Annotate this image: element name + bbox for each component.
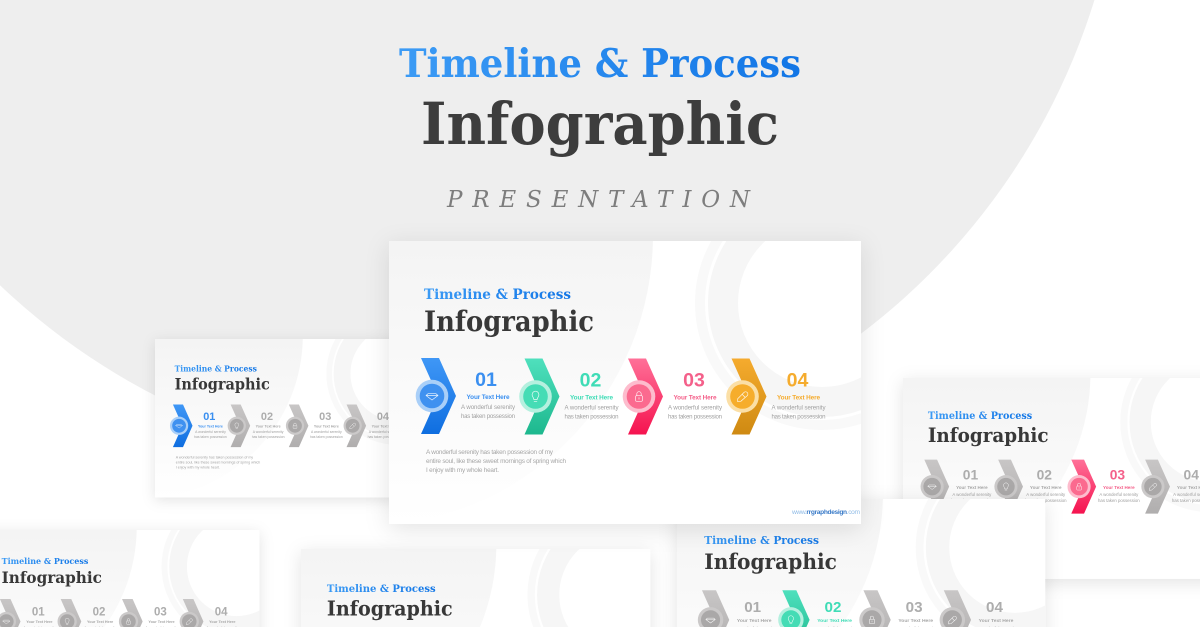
slide preview: bottom left, all steps grey: Your Text Here <box>26 620 53 624</box>
slide preview: right, step 3 active: 02 <box>1037 467 1052 483</box>
slide preview: left, step 1 active: 01 <box>203 411 215 423</box>
slide preview: right, step 3 active: 04 <box>1184 467 1199 483</box>
slide preview: bottom left, all steps grey: 04 <box>215 607 228 619</box>
slide preview: bottom right, step 2 active: Infographic <box>704 550 837 575</box>
slide preview: bottom right, step 2 active <box>672 498 1050 627</box>
headline: Infographic: Infographic <box>421 90 779 158</box>
headline: Timeline & Process: Timeline & Process <box>399 41 801 87</box>
slide preview: left, step 1 active: Your Text Here <box>198 424 223 428</box>
website link: www.rrgraphdesign.com <box>791 509 860 516</box>
slide preview: right, step 3 active: 03 <box>1110 467 1125 483</box>
slide preview: bottom left, all steps grey: 03 <box>154 607 167 619</box>
slide preview: right, step 3 active: has taken possession <box>951 498 993 503</box>
step 02 <box>519 358 619 434</box>
slide preview: bottom left, all steps grey: Timeline & Process <box>2 556 89 566</box>
slide preview: bottom middle: Timeline & Process <box>327 583 436 595</box>
slide preview: bottom middle: Infographic <box>327 597 453 621</box>
slide preview: left, step 1 active: 04 <box>377 411 389 423</box>
slide preview: bottom right, step 2 active: 04 <box>986 599 1003 616</box>
main slide preview <box>69 0 944 527</box>
slide preview: bottom right, step 2 active: Your Text Here <box>979 618 1014 624</box>
slide preview: left, step 1 active: has taken possession <box>368 435 401 439</box>
slide preview: left, step 1 active: Timeline & Process <box>175 364 257 373</box>
step 03: A wonderful serenity <box>668 404 723 412</box>
body paragraph: entire soul, like these sweet mornings of spring which <box>426 458 566 465</box>
body paragraph: I enjoy with my whole heart. <box>426 467 499 474</box>
step 03 <box>623 358 723 434</box>
step 02: Your Text Here <box>570 394 613 402</box>
step 01: has taken possession <box>461 413 515 420</box>
slide preview: left, step 1 active: A wonderful serenity <box>253 430 284 434</box>
body paragraph <box>426 449 566 474</box>
slide preview: left, step 1 active: has taken possession <box>252 435 285 439</box>
slide preview: right, step 3 active <box>898 377 1200 587</box>
body paragraph: A wonderful serenity has taken possession of my <box>426 449 554 456</box>
slide preview: right, step 3 active: A wonderful serenity <box>1099 492 1139 497</box>
step 04: A wonderful serenity <box>772 404 826 412</box>
slide preview: left, step 1 active: 02 <box>261 411 273 423</box>
slide preview: bottom right, step 2 active: 03 <box>906 599 923 616</box>
slide preview: bottom right, step 2 active: Your Text Here <box>898 618 933 624</box>
slide preview: left, step 1 active: has taken possession <box>194 435 227 439</box>
slide preview: left, step 1 active: 03 <box>319 411 331 423</box>
slide preview: right, step 3 active: Your Text Here <box>956 485 988 490</box>
main slide title: Timeline & Process <box>424 287 571 303</box>
slide preview: bottom left, all steps grey: Your Text Here <box>209 620 235 624</box>
slide preview: left, step 1 active: has taken possession <box>310 435 343 439</box>
slide preview: left, step 1 active: Infographic <box>175 374 270 393</box>
slide preview: bottom left, all steps grey: Infographic <box>2 568 102 587</box>
step 01 <box>416 358 516 434</box>
step 01: 01 <box>475 369 497 391</box>
slide preview: right, step 3 active: Infographic <box>928 424 1049 447</box>
step 01: Your Text Here <box>466 394 510 401</box>
background circle <box>0 0 1124 469</box>
slide preview: right, step 3 active: has taken possession <box>1025 498 1067 503</box>
slide preview: bottom right, step 2 active: Timeline & Process <box>704 534 819 547</box>
slide preview: left, step 1 active: Your Text Here <box>372 424 397 428</box>
slide preview: left, step 1 active: A wonderful serenity <box>311 430 342 434</box>
slide preview: bottom right, step 2 active: Your Text Here <box>737 618 772 624</box>
slide preview: bottom middle <box>64 328 712 627</box>
slide preview: right, step 3 active: Timeline & Process <box>928 410 1033 422</box>
slide preview: right, step 3 active: A wonderful serenity <box>952 492 992 497</box>
step 04: has taken possession <box>772 414 826 420</box>
slide preview: bottom left, all steps grey: 02 <box>93 607 105 619</box>
slide preview: left, step 1 active: A wonderful serenity has taken possession of my <box>176 455 253 459</box>
slide preview: left, step 1 active: A wonderful serenity <box>195 430 226 434</box>
step 03: Your Text Here <box>674 394 717 402</box>
step 02: has taken possession <box>564 414 618 420</box>
slide preview: bottom left, all steps grey: Your Text Here <box>87 620 113 624</box>
slide preview: left, step 1 active: A wonderful serenity <box>369 430 400 434</box>
step 04: 04 <box>787 370 808 392</box>
slide preview: bottom right, step 2 active: 02 <box>825 599 841 616</box>
step 02: A wonderful serenity <box>564 404 619 412</box>
slide preview: left, step 1 active: Your Text Here <box>314 424 339 428</box>
slide preview: right, step 3 active: A wonderful serenity <box>1026 492 1066 497</box>
slide preview: bottom right, step 2 active: 01 <box>744 599 762 616</box>
slide preview: bottom right, step 2 active: Your Text Here <box>817 618 852 624</box>
slide preview: bottom left, all steps grey: 01 <box>32 607 45 619</box>
step 03: has taken possession <box>668 414 722 420</box>
step 03: 03 <box>683 370 705 392</box>
slide preview: left, step 1 active: Your Text Here <box>256 424 281 428</box>
slide preview: right, step 3 active: 01 <box>963 467 978 483</box>
slide preview: bottom left, all steps grey <box>0 530 263 627</box>
step 04 <box>726 358 826 434</box>
slide preview: left, step 1 active: entire soul, like these sweet mornings of spring which <box>176 460 260 464</box>
step 01: A wonderful serenity <box>461 404 516 411</box>
main slide heading: Infographic <box>424 305 594 338</box>
slide preview: right, step 3 active: has taken possession <box>1098 498 1140 503</box>
slide preview: left, step 1 active: I enjoy with my whole heart. <box>176 465 220 469</box>
slide preview: bottom left, all steps grey: Your Text Here <box>148 620 175 624</box>
slide preview: left, step 1 active <box>152 339 389 504</box>
slide preview: right, step 3 active: Your Text Here <box>1103 485 1135 490</box>
slide preview: right, step 3 active: Your Text Here <box>1030 485 1062 490</box>
step 02: 02 <box>580 370 601 392</box>
subtitle: Presentation: PRESENTATION <box>446 187 751 213</box>
step 04: Your Text Here <box>777 394 820 402</box>
